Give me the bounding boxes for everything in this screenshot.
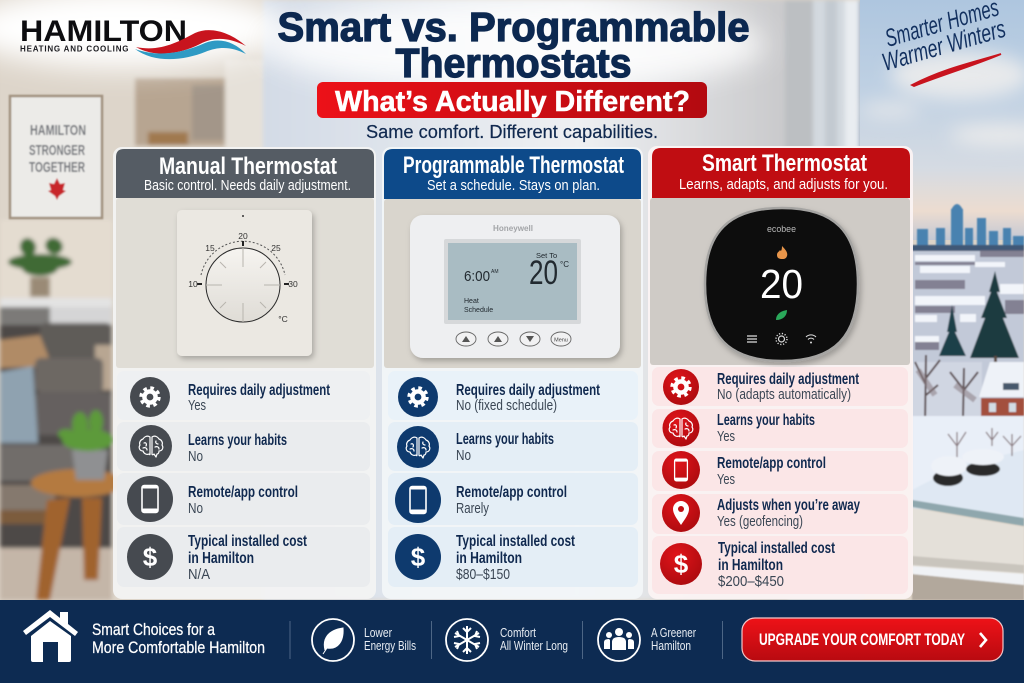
photo: programmable thermostat: Menu	[554, 338, 568, 344]
row: installed cost	[117, 527, 370, 587]
subtitle banner: What’s Actually Different?	[335, 86, 690, 118]
footer tagline: More Comfortable Hamilton	[92, 638, 265, 657]
header: smart: Learns, adapts, and adjusts for you.	[679, 176, 888, 193]
row: learns your habits: Yes	[717, 428, 735, 445]
title: Smart vs. Programmable	[278, 4, 750, 50]
row: requires daily adjustment: Yes	[188, 397, 206, 414]
row: remote control	[117, 473, 370, 525]
row: remote control: Remote/app control	[456, 484, 567, 501]
photo: programmable thermostat: °C	[560, 260, 569, 269]
photo: programmable thermostat: Honeywell	[493, 224, 533, 233]
row: requires daily adjustment	[388, 371, 638, 420]
tagline: Same comfort. Different capabilities.	[366, 122, 658, 142]
photo: manual dial thermostat: 30	[288, 279, 298, 289]
row: installed cost: Typical installed cost	[718, 540, 835, 557]
row: remote control: Yes	[717, 471, 735, 488]
row: installed cost: Typical installed cost	[188, 533, 307, 550]
row: installed cost: $80–$150	[456, 566, 510, 583]
benefit: lower energy bills: Lower	[364, 625, 393, 640]
row: requires daily adjustment: No (fixed schedule)	[456, 397, 557, 414]
header: smart: Smart Thermostat	[702, 150, 867, 177]
photo: manual dial thermostat: 25	[271, 243, 281, 253]
row: learns your habits: Learns your habits	[456, 431, 554, 448]
benefit: comfort all winter long	[446, 619, 568, 661]
row: requires daily adjustment: No (adapts automatically)	[717, 386, 851, 403]
poster: Hamilton Stronger Together	[10, 96, 102, 218]
poster: Hamilton Stronger Together: STRONGER	[29, 142, 85, 159]
row: installed cost	[652, 536, 908, 594]
row: installed cost: in Hamilton	[456, 550, 522, 567]
row: learns your habits: Learns your habits	[717, 412, 815, 429]
icon: house	[23, 610, 78, 662]
photo: manual dial thermostat: °C	[278, 314, 288, 324]
panel: programmable thermostat	[382, 147, 643, 599]
photo: programmable thermostat: AM	[491, 269, 498, 275]
footer band	[0, 600, 1024, 683]
benefit: comfort all winter long: Comfort	[500, 625, 536, 640]
button: upgrade your comfort today	[742, 618, 1003, 661]
title	[278, 4, 750, 86]
benefit: a greener Hamilton: A Greener	[651, 625, 697, 640]
benefit: lower energy bills: Energy Bills	[364, 638, 416, 653]
photo: programmable thermostat: 20	[529, 254, 558, 292]
row: installed cost: in Hamilton	[718, 557, 783, 574]
header: smart	[652, 148, 910, 198]
row: remote control: Remote/app control	[188, 484, 298, 501]
row: requires daily adjustment: Requires daily adjustment	[456, 382, 600, 399]
header: manual	[116, 149, 374, 198]
photo: manual dial thermostat: 15	[205, 243, 215, 253]
photo: programmable thermostat: Schedule	[464, 307, 493, 314]
row: installed cost: $	[143, 542, 158, 572]
photo: manual dial thermostat: 20	[238, 231, 248, 241]
benefit: a greener Hamilton: Hamilton	[651, 638, 691, 653]
row: installed cost: $	[674, 549, 689, 579]
benefit: comfort all winter long: All Winter Long	[500, 638, 568, 653]
poster: Hamilton Stronger Together: TOGETHER	[29, 159, 85, 176]
footer tagline	[92, 620, 265, 657]
row: learns your habits	[652, 409, 908, 448]
row: adjusts when away: Yes (geofencing)	[717, 513, 803, 530]
row: installed cost: Typical installed cost	[456, 533, 575, 550]
row: learns your habits: No	[188, 448, 203, 465]
photo: smart thermostat	[650, 198, 910, 365]
row: installed cost: N/A	[188, 566, 210, 583]
header: manual: Basic control. Needs daily adjustment.	[144, 177, 351, 194]
logo: Hamilton Heating and Cooling	[20, 15, 246, 59]
row: installed cost: $	[411, 542, 426, 572]
footer tagline: Smart Choices for a	[92, 620, 215, 639]
row: learns your habits	[117, 422, 370, 471]
benefit: lower energy bills	[312, 619, 416, 661]
row: installed cost: in Hamilton	[188, 550, 254, 567]
header: manual: Manual Thermostat	[159, 153, 337, 180]
row: remote control: No	[188, 500, 203, 517]
poster: Hamilton Stronger Together: HAMILTON	[30, 122, 86, 139]
row: learns your habits: No	[456, 447, 471, 464]
row: requires daily adjustment: Requires daily adjustment	[188, 382, 330, 399]
row: requires daily adjustment	[652, 367, 908, 406]
row: requires daily adjustment	[117, 371, 370, 420]
header: programmable	[384, 149, 641, 199]
panel: manual thermostat	[113, 147, 376, 599]
row: learns your habits	[388, 422, 638, 471]
row: remote control	[388, 473, 638, 525]
benefit: a greener Hamilton	[598, 619, 697, 661]
row: adjusts when away	[652, 494, 908, 534]
panel: smart thermostat	[648, 146, 913, 599]
row: remote control: Rarely	[456, 500, 489, 517]
row: requires daily adjustment: Requires daily adjustment	[717, 371, 859, 388]
logo: Hamilton Heating and Cooling: HAMILTON	[20, 15, 187, 48]
photo: programmable thermostat: Heat	[464, 298, 479, 305]
header: programmable: Set a schedule. Stays on plan.	[427, 177, 600, 194]
photo: programmable thermostat: Set To	[536, 251, 557, 260]
row: adjusts when away: Adjusts when you’re away	[717, 497, 860, 514]
row: remote control	[652, 451, 908, 491]
row: learns your habits: Learns your habits	[188, 432, 287, 449]
photo: manual dial thermostat: 10	[188, 279, 198, 289]
photo: programmable thermostat: 6:00	[464, 268, 490, 285]
photo: smart thermostat: 20	[760, 261, 803, 307]
photo: programmable thermostat	[384, 199, 641, 368]
photo: manual dial thermostat	[116, 198, 374, 368]
row: installed cost: $200–$450	[718, 573, 784, 590]
row: remote control: Remote/app control	[717, 455, 826, 472]
logo: Hamilton Heating and Cooling: HEATING AND COOLING	[20, 44, 129, 54]
title: Thermostats	[396, 40, 632, 86]
photo: smart thermostat: ecobee	[767, 224, 796, 234]
row: installed cost	[388, 527, 638, 587]
header: programmable: Programmable Thermostat	[403, 152, 624, 179]
